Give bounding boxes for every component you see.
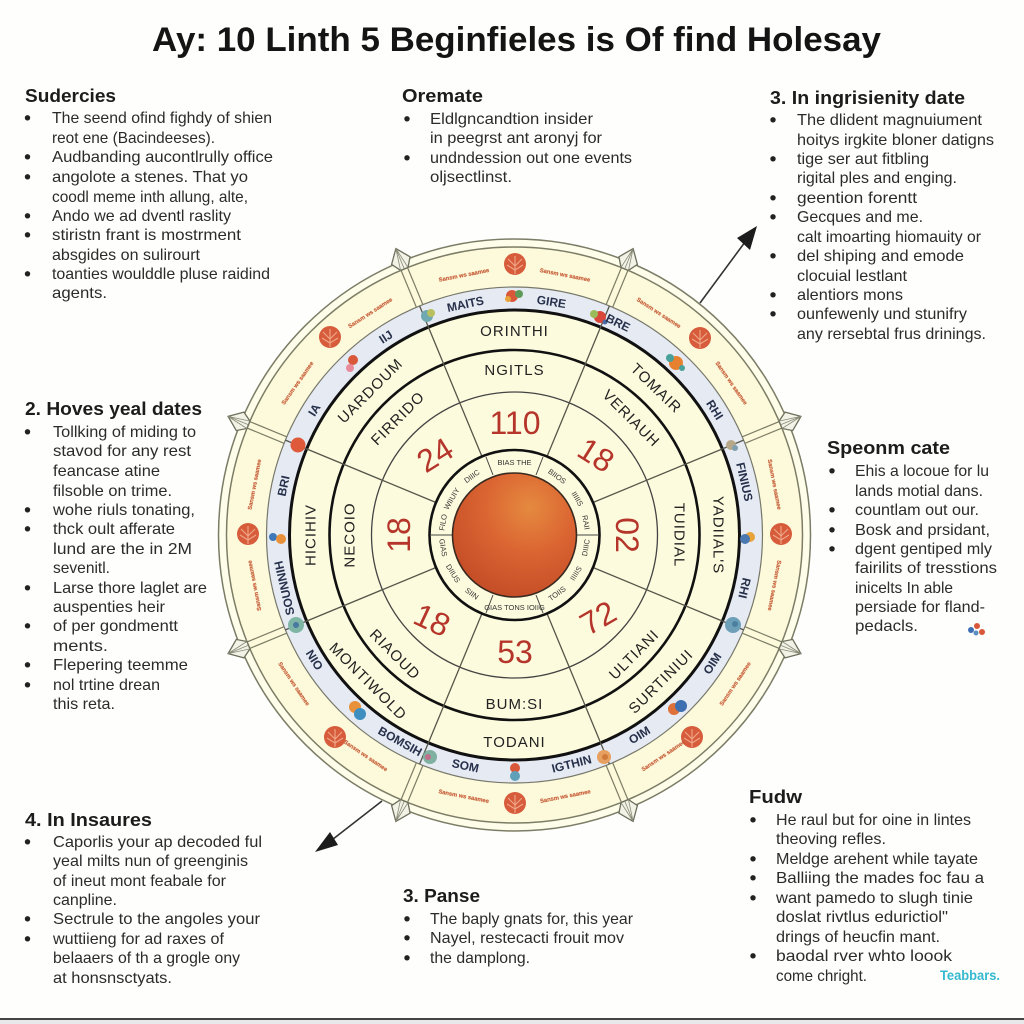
text block: 3. Panse: The baply gnats for, this year xyxy=(430,911,634,928)
text block: 4. In Insaures: canpline. xyxy=(53,892,117,909)
text block: Sudercies: absgides on sulirourt xyxy=(52,247,201,264)
text block: 4. In Insaures: wuttiieng for ad raxes of xyxy=(52,931,225,948)
centre ring labels: IIIIIS xyxy=(568,564,584,582)
text block: 2. Hoves yeal dates: lund are the in 2M xyxy=(53,541,192,558)
text block: 4. In Insaures: Sectrule to the angoles your xyxy=(53,911,261,928)
text block: Fudw: doslat rivtlus edurictiol" xyxy=(776,909,948,926)
text block: 3. In ingrisienity date: geention forentt xyxy=(797,190,918,207)
ring numbers: 24 xyxy=(410,430,460,480)
band labels: RHI xyxy=(703,397,726,422)
title: Ay: 10 Linth 5 Beginfieles is Of find Holesay xyxy=(152,21,881,59)
text block: Speonm cate: pedacls. xyxy=(855,618,918,635)
outer ring small labels: Sansm ws saamee xyxy=(438,268,491,284)
outer ring small labels: Sansm ws saamee xyxy=(641,739,687,773)
outer ring small labels: Sansm ws saamee xyxy=(348,297,394,330)
text block: 2. Hoves yeal dates: sevenitl. xyxy=(53,560,110,577)
centre ring labels: DIIUS xyxy=(444,563,462,584)
outer ring small labels: Sansm ws saamee xyxy=(539,268,591,284)
text block: Oremate: undndession out one events xyxy=(430,150,632,167)
text block: Speonm cate: lands motial dans. xyxy=(855,483,983,500)
text block: Sudercies: toanties woulddle pluse raidind xyxy=(52,266,270,283)
text block: Fudw: theoving refles. xyxy=(776,831,886,848)
centre ring labels: DIIIC xyxy=(580,538,592,557)
ring numbers: 18 xyxy=(381,517,417,553)
outer ring small labels: Sansm ws saamee xyxy=(438,789,490,805)
ring labels: middle xyxy=(342,362,688,713)
text block: 3. Panse xyxy=(403,886,634,967)
text block: Speonm cate xyxy=(827,438,997,635)
ring labels: middle: NGITLS xyxy=(484,362,545,379)
band labels: FINIUS xyxy=(733,461,756,503)
ring labels: outer: MONTIWOLD xyxy=(326,640,410,724)
outer ring small labels: Sansm ws saamee xyxy=(281,360,316,406)
outer ring small labels: Sansm ws saamee xyxy=(719,661,753,707)
text block: 4. In Insaures: belaaers of th a grogle ony xyxy=(53,950,240,967)
text block: 4. In Insaures: 4. In Insaures xyxy=(25,810,152,830)
centre ring labels: BIIOS xyxy=(546,467,568,486)
circular calendar wheel xyxy=(218,239,810,831)
text block: 3. In ingrisienity date xyxy=(770,88,994,343)
text block: 3. In ingrisienity date: del shiping and emode xyxy=(797,248,964,265)
ring labels: outer: HICIHIV xyxy=(302,504,320,566)
ring labels: outer: SURTINIUI xyxy=(626,646,697,717)
text block: Fudw: He raul but for oine in lintes xyxy=(776,812,971,829)
text block: 3. In ingrisienity date: calt imoarting hiomauity or xyxy=(797,229,982,246)
text block: Sudercies: angolote a stenes. That yo xyxy=(52,169,248,186)
centre ring xyxy=(430,450,600,620)
text block: 2. Hoves yeal dates: Flepering teemme xyxy=(53,657,188,674)
text block: 3. In ingrisienity date: ounfewenly und stunifry xyxy=(797,306,967,323)
ring numbers: 72 xyxy=(574,594,622,642)
text block: Fudw: drings of heucfin mant. xyxy=(776,929,940,946)
centre ring labels: BIAS THE xyxy=(497,458,532,467)
text block: Speonm cate: Bosk and prsidant, xyxy=(855,522,990,539)
band labels: OIM xyxy=(700,650,724,677)
centre ring labels: WIIUIY xyxy=(442,486,462,511)
text block: 2. Hoves yeal dates: 2. Hoves yeal dates xyxy=(25,399,202,419)
outer ring small labels: Sansm ws saamee xyxy=(766,459,782,511)
watermark label: Teabbars. xyxy=(940,967,1000,983)
text block: Fudw: baodal rver whto loook xyxy=(776,948,953,965)
centre sphere xyxy=(452,473,576,597)
text block: Speonm cate: persiade for fland- xyxy=(855,599,985,616)
text block: Oremate: Eldlgncandtion insider xyxy=(430,111,594,128)
ring labels: middle: VERIAUH xyxy=(599,387,663,451)
text block: Oremate: in peegrst ant aronyj for xyxy=(430,130,603,147)
text block: Fudw: Balliing the mades foc fau a xyxy=(776,870,984,887)
centre ring labels: RAII xyxy=(580,514,592,530)
centre ring labels: IIIIIS xyxy=(570,490,585,508)
text block: Sudercies: agents. xyxy=(52,285,107,302)
band labels: SOM xyxy=(451,756,480,776)
band labels: IA xyxy=(305,401,324,419)
centre ring labels: GIAS TONS IOIIG xyxy=(484,603,545,612)
text block: 2. Hoves yeal dates: thck oult afferate xyxy=(53,521,175,538)
text block: Speonm cate: countlam out our. xyxy=(855,502,979,519)
ring labels: middle: BUM:SI xyxy=(486,696,543,713)
outer ring medallions xyxy=(237,253,792,814)
outer ring small labels: Sansm ws saamee xyxy=(714,361,748,407)
centre ring labels: SIIN xyxy=(463,586,480,602)
ring labels: outer: UARDOUM xyxy=(335,355,406,427)
text block: 2. Hoves yeal dates: ments. xyxy=(53,638,108,655)
text block: 3. In ingrisienity date: hoitys irgkite bloner datigns xyxy=(797,132,994,149)
text block: Fudw: come chright. xyxy=(776,968,867,985)
band labels: IGTHIN xyxy=(550,752,593,776)
outer ring small labels: Sansm ws saamee xyxy=(342,740,389,774)
outer ring small labels: Sansm ws saamee xyxy=(540,789,592,805)
ring labels: middle: RIAOUD xyxy=(366,626,423,684)
text block: Sudercies: Audbanding aucontlrully office xyxy=(52,149,273,166)
ring numbers: 18 xyxy=(571,430,621,480)
text block: Sudercies: Ando we ad dventl raslity xyxy=(52,208,231,225)
band labels: GIRE xyxy=(536,293,567,311)
text block: 2. Hoves yeal dates: of per gondmentt xyxy=(53,618,179,635)
text block: 2. Hoves yeal dates: Tollking of miding to xyxy=(53,424,196,441)
band labels: OIM xyxy=(626,723,653,747)
text block: Oremate: oljsectlinst. xyxy=(430,169,512,186)
text block: 2. Hoves yeal dates: feancase atine xyxy=(53,463,160,480)
centre ring labels xyxy=(437,458,592,612)
ring labels: middle: ULTIANI xyxy=(606,626,663,683)
arrow: bottom left xyxy=(315,801,382,852)
text block: Oremate: Oremate xyxy=(402,86,483,106)
band labels: RHI xyxy=(735,576,754,600)
text block: 3. In ingrisienity date: alentiors mons xyxy=(797,287,903,304)
icon: small flowers xyxy=(968,623,985,636)
outer ring small labels xyxy=(247,268,782,805)
band flower icons xyxy=(269,290,755,781)
outer ring small labels: Sansm ws saamee xyxy=(248,458,263,510)
text block: 2. Hoves yeal dates: stavod for any rest xyxy=(53,443,192,460)
ring labels: middle: FIRRIDO xyxy=(368,388,428,449)
text block: Sudercies: stiristn frant is mostrment xyxy=(52,227,242,244)
text block: 2. Hoves yeal dates: nol trtine drean xyxy=(53,677,160,694)
ring labels: outer: YADIIAL'S xyxy=(710,496,726,574)
text block: Fudw: want pamedo to slugh tinie xyxy=(775,890,973,907)
ring numbers xyxy=(381,405,645,670)
centre ring labels: DIIIC xyxy=(462,467,482,485)
ring numbers: 02 xyxy=(609,517,645,553)
text block: 4. In Insaures: Caporlis your ap decoded ful xyxy=(53,834,262,851)
band labels: NIO xyxy=(303,647,326,673)
band labels: BOMSIH xyxy=(376,724,424,759)
text block: Fudw: Meldge arehent while tayate xyxy=(776,851,978,868)
text block: 3. In ingrisienity date: clocuial lestlant xyxy=(797,268,908,285)
centre ring labels: FILO xyxy=(437,513,449,531)
band labels: SOUNNIH xyxy=(272,560,298,617)
corner gems xyxy=(224,245,805,825)
band labels xyxy=(272,293,756,776)
ring numbers: 110 xyxy=(489,405,541,441)
text block: Sudercies: Sudercies xyxy=(25,86,116,106)
ring numbers: 18 xyxy=(408,596,456,644)
ring labels: outer: TOMAIR xyxy=(627,360,685,417)
ring labels: outer: TODANI xyxy=(483,734,546,751)
text block: 4. In Insaures: of ineut mont feabale for xyxy=(53,873,227,890)
text block: 3. Panse: Nayel, restecacti frouit mov xyxy=(430,930,624,947)
text block: 4. In Insaures: at honsnsctyats. xyxy=(53,970,172,987)
band labels: BRI xyxy=(275,474,293,497)
text block: 3. In ingrisienity date: tige ser aut fitbling xyxy=(797,151,929,168)
band labels: BRE xyxy=(603,311,632,335)
text block: 2. Hoves yeal dates: Larse thore laglet are xyxy=(53,580,207,597)
text block: 2. Hoves yeal dates: this reta. xyxy=(53,696,115,713)
centre ring labels: TOIIS xyxy=(547,584,568,603)
text block: 4. In Insaures: yeal milts nun of greenginis xyxy=(53,853,248,870)
text block: 3. In ingrisienity date: 3. In ingrisienity date xyxy=(770,88,965,108)
band labels: IIJ xyxy=(377,328,395,347)
text block: Speonm cate: dgent gentiped mly xyxy=(855,541,992,558)
text block: Sudercies: coodl meme inth allung, alte, xyxy=(52,189,248,206)
ring labels: middle: TUIDIAL xyxy=(670,503,688,567)
outer ring small labels: Sansm ws saamee xyxy=(276,661,310,708)
centre ring labels: GIAS xyxy=(437,538,449,557)
ring numbers: 53 xyxy=(497,634,533,670)
text block: 2. Hoves yeal dates: filsoble on trime. xyxy=(53,483,172,500)
text block: 2. Hoves yeal dates: wohe riuls tonating, xyxy=(52,502,195,519)
text block: Sudercies: reot ene (Bacindeeses). xyxy=(52,130,215,147)
arrow: top right xyxy=(700,226,757,303)
text block: Speonm cate: Speonm cate xyxy=(827,438,950,458)
text block: Speonm cate: Ehis a locoue for lu xyxy=(855,463,989,480)
band labels: MAITS xyxy=(446,293,485,315)
text block: Sudercies: The seend ofind fighdy of shien xyxy=(52,110,272,127)
text block: 3. In ingrisienity date: The dlident magnuiument xyxy=(797,112,983,129)
text block: 4. In Insaures xyxy=(25,810,262,987)
outer ring small labels: Sansm ws saamee xyxy=(766,560,781,612)
text block: Oremate xyxy=(402,86,632,186)
outer ring small labels: Sansm ws saamee xyxy=(247,559,263,611)
text block: 2. Hoves yeal dates xyxy=(25,399,207,713)
text block: Speonm cate: fairilits of tresstions xyxy=(855,560,997,577)
text block: 3. Panse: 3. Panse xyxy=(403,886,480,906)
ring labels: middle: NECOIO xyxy=(342,502,358,568)
text block: Speonm cate: inicelts In able xyxy=(855,580,953,597)
outer ring small labels: Sansm ws saamee xyxy=(635,297,682,330)
text block: 3. Panse: the damplong. xyxy=(430,950,530,967)
text block: Fudw: Fudw xyxy=(749,787,803,807)
text block: 3. In ingrisienity date: any rersebtal frus drinings. xyxy=(797,326,986,343)
ring labels: outer: ORINTHI xyxy=(480,323,549,340)
text block: 3. In ingrisienity date: Gecques and me. xyxy=(797,209,923,226)
text block: 2. Hoves yeal dates: auspenties heir xyxy=(53,599,166,616)
text block: Sudercies xyxy=(25,86,273,302)
text block: Fudw xyxy=(749,787,984,985)
text block: 3. In ingrisienity date: rigital ples and enging. xyxy=(797,170,957,187)
ring labels: outer xyxy=(302,323,726,751)
